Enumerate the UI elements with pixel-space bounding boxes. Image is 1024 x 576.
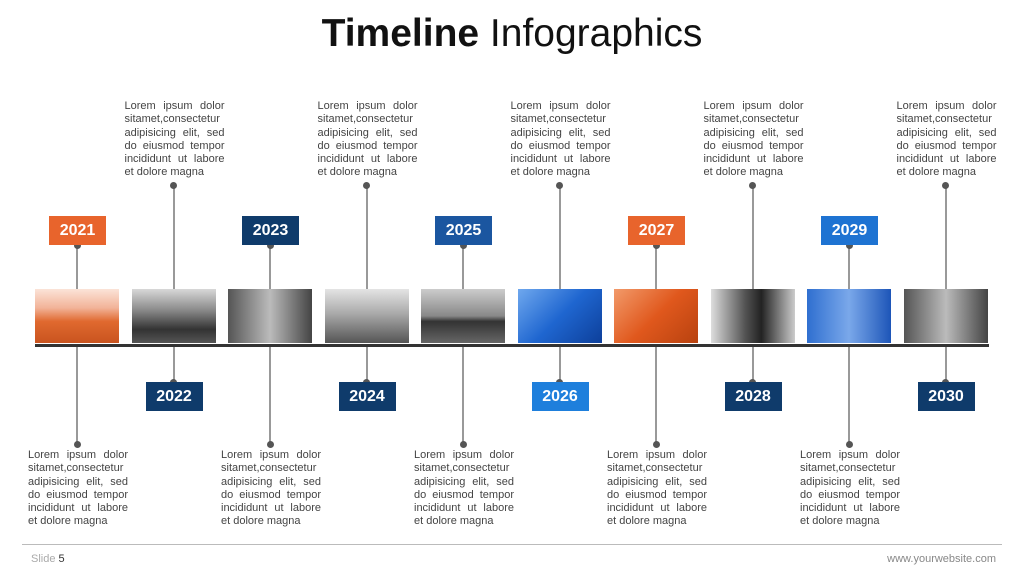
column 2029 xyxy=(800,216,900,527)
image 2027 xyxy=(614,289,698,343)
image 2023 xyxy=(228,289,312,343)
year 2021: 2021 xyxy=(60,222,95,239)
year 2023: 2023 xyxy=(253,222,288,239)
year 2029 xyxy=(821,216,878,245)
text 2024: Lorem ipsum dolor sitamet,consectetur adipisicing elit, sed do eiusmod tempor incididunt ut labore et dolore magna xyxy=(318,100,418,178)
year 2024: 2024 xyxy=(349,388,385,405)
website: www.yourwebsite.com xyxy=(887,553,996,565)
column 2027 xyxy=(607,216,707,527)
baseline xyxy=(35,344,989,347)
column 2025 xyxy=(414,216,514,527)
image 2028 xyxy=(710,289,794,343)
column 2021 xyxy=(28,216,128,527)
image 2026 xyxy=(518,289,602,343)
image 2029 xyxy=(807,289,891,343)
image 2022 xyxy=(132,289,216,343)
text 2028: Lorem ipsum dolor sitamet,consectetur adipisicing elit, sed do eiusmod tempor incididunt ut labore et dolore magna xyxy=(704,100,804,178)
column 2022 xyxy=(124,100,224,411)
slide number: Slide 5 xyxy=(31,553,65,565)
year 2028: 2028 xyxy=(735,388,771,405)
text 2030: Lorem ipsum dolor sitamet,consectetur adipisicing elit, sed do eiusmod tempor incididunt ut labore et dolore magna xyxy=(896,100,996,178)
year 2021 xyxy=(49,216,106,245)
text 2021: Lorem ipsum dolor sitamet,consectetur adipisicing elit, sed do eiusmod tempor incididunt ut labore et dolore magna xyxy=(28,449,128,527)
year 2023 xyxy=(242,216,299,245)
image 2021 xyxy=(35,289,119,343)
year 2025 xyxy=(435,216,492,245)
text 2027: Lorem ipsum dolor sitamet,consectetur adipisicing elit, sed do eiusmod tempor incididunt ut labore et dolore magna xyxy=(607,449,707,527)
year 2026: 2026 xyxy=(542,388,578,405)
footer xyxy=(22,544,1002,576)
image 2030 xyxy=(904,289,988,343)
text 2022: Lorem ipsum dolor sitamet,consectetur adipisicing elit, sed do eiusmod tempor incididunt ut labore et dolore magna xyxy=(124,100,224,178)
image 2025 xyxy=(421,289,505,343)
column 2030 xyxy=(896,100,996,411)
column 2028 xyxy=(704,100,804,411)
year 2027 xyxy=(628,216,685,245)
year 2030 xyxy=(918,382,974,411)
text 2029: Lorem ipsum dolor sitamet,consectetur adipisicing elit, sed do eiusmod tempor incididunt ut labore et dolore magna xyxy=(800,449,900,527)
year 2025: 2025 xyxy=(446,222,481,239)
text 2026: Lorem ipsum dolor sitamet,consectetur adipisicing elit, sed do eiusmod tempor incididunt ut labore et dolore magna xyxy=(510,100,610,178)
year 2029: 2029 xyxy=(832,222,867,239)
column 2024 xyxy=(318,100,418,411)
title: Timeline Infographics xyxy=(322,12,702,55)
text 2023: Lorem ipsum dolor sitamet,consectetur adipisicing elit, sed do eiusmod tempor incididunt ut labore et dolore magna xyxy=(221,449,321,527)
year 2028 xyxy=(724,382,782,411)
column 2023 xyxy=(221,216,321,527)
year 2024 xyxy=(338,382,396,411)
column 2026 xyxy=(510,100,610,411)
year 2030: 2030 xyxy=(928,388,964,405)
year 2027: 2027 xyxy=(639,222,674,239)
year 2022: 2022 xyxy=(156,388,192,405)
year 2026 xyxy=(532,382,588,411)
year 2022 xyxy=(146,382,202,411)
image 2024 xyxy=(324,289,408,343)
text 2025: Lorem ipsum dolor sitamet,consectetur adipisicing elit, sed do eiusmod tempor incididunt ut labore et dolore magna xyxy=(414,449,514,527)
